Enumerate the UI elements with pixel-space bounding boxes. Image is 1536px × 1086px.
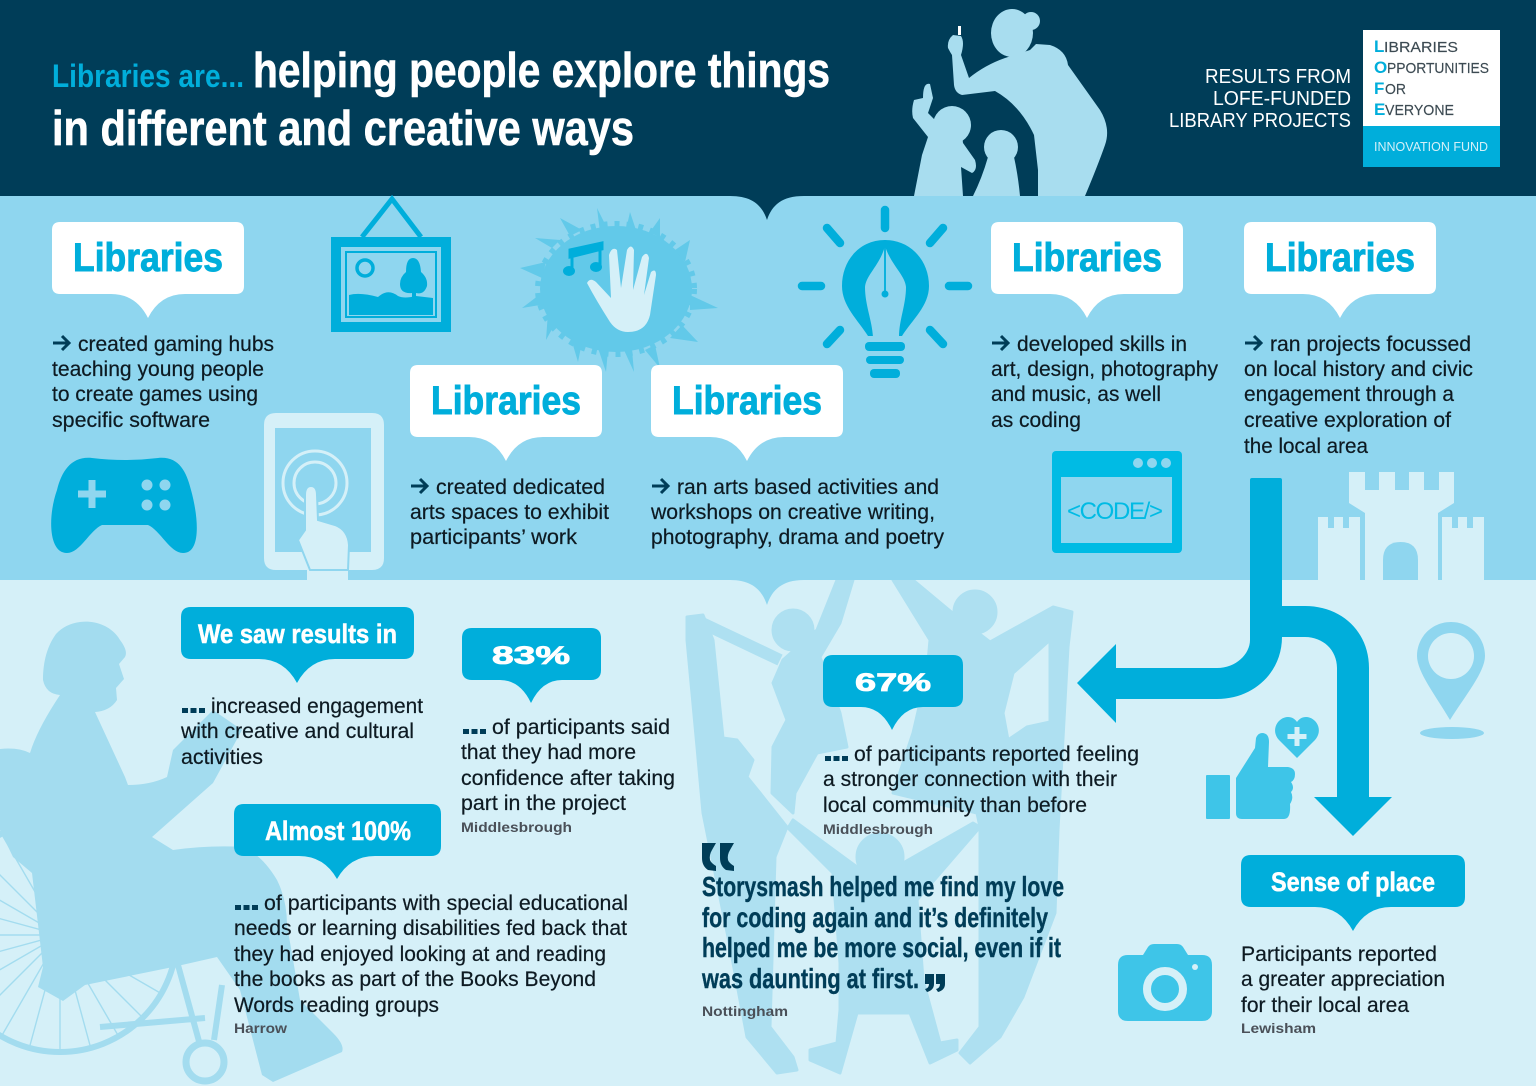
text: local area bbox=[1241, 943, 1445, 1036]
callout: we saw results in: We saw results in bbox=[198, 619, 397, 649]
icon: tablet with touch bbox=[264, 413, 384, 580]
text: community bbox=[823, 743, 1139, 837]
text: arts spaces: arts spaces to exhibit bbox=[410, 501, 609, 524]
text: special educational needs bbox=[234, 892, 628, 1036]
callout: libraries 4: Libraries bbox=[1012, 236, 1162, 280]
text: engagement: activities bbox=[181, 746, 263, 769]
text: community: Middlesbrough bbox=[823, 821, 933, 837]
arrow: split direction arrow bbox=[1077, 478, 1392, 836]
text: arts activities: workshops on creative writing, bbox=[650, 501, 935, 524]
text: community: local community than before bbox=[823, 794, 1087, 817]
text: skills bbox=[991, 333, 1218, 432]
text: local history: the local area bbox=[1244, 435, 1368, 458]
text: gaming hubs bbox=[52, 333, 274, 432]
text: engagement: increased engagement bbox=[211, 695, 423, 718]
text: skills: as coding bbox=[991, 409, 1081, 432]
header background bbox=[0, 0, 1536, 196]
text: arts spaces: participants’ work bbox=[410, 526, 578, 549]
text: local history bbox=[1244, 333, 1473, 458]
text: community: of participants reported feeling bbox=[854, 743, 1139, 766]
silhouette: adult and children drawing bbox=[912, 9, 1107, 196]
logo: F bbox=[1374, 79, 1384, 98]
text: gaming hubs: created gaming hubs bbox=[78, 333, 274, 356]
logo: OR bbox=[1385, 81, 1406, 98]
icon: thumbs up with heart bbox=[1206, 717, 1319, 819]
logo: PPORTUNITIES bbox=[1387, 60, 1489, 77]
header notch bbox=[730, 196, 804, 220]
icon: castle bbox=[1318, 472, 1484, 580]
silhouette: children playing bbox=[687, 580, 1072, 1073]
text: special educational needs: of participants with special educational bbox=[264, 892, 628, 915]
text: confidence: part in the project bbox=[461, 792, 626, 815]
text: special educational needs: Words reading groups bbox=[234, 994, 439, 1017]
icon: camera bbox=[1118, 944, 1212, 1021]
title: in different and creative ways bbox=[52, 102, 634, 156]
callout: almost 100%: Almost 100% bbox=[265, 816, 411, 846]
text: local area: for their local area bbox=[1241, 994, 1409, 1017]
icon: code window: <CODE/> bbox=[1067, 498, 1163, 525]
callout: libraries 2 bbox=[410, 365, 602, 461]
icon: paint splat with hand and music note bbox=[520, 208, 718, 372]
callout: libraries 2: Libraries bbox=[431, 379, 581, 423]
icon: location pin bbox=[1417, 622, 1485, 739]
quote: Storysmash: Nottingham bbox=[702, 1003, 788, 1019]
header caption: LOFE-FUNDED bbox=[1213, 88, 1351, 110]
text: special educational needs: they had enjoyed looking at and reading bbox=[234, 943, 606, 966]
quote: Storysmash: for coding again and it’s definitely bbox=[702, 902, 1048, 933]
callout: we saw results in bbox=[181, 607, 414, 683]
logo: IBRARIES bbox=[1384, 39, 1458, 56]
logo: INNOVATION FUND bbox=[1374, 140, 1488, 154]
callout: libraries 3: Libraries bbox=[672, 379, 822, 423]
text: arts activities bbox=[650, 476, 945, 549]
text: confidence: of participants said bbox=[492, 716, 670, 739]
callout: sense of place: Sense of place bbox=[1271, 867, 1435, 897]
callout: libraries 5 bbox=[1244, 222, 1436, 318]
text: skills: and music, as well bbox=[991, 383, 1161, 406]
quote: Storysmash: helped me be more social, even if it bbox=[702, 932, 1061, 963]
text: community: a stronger connection with their bbox=[823, 768, 1117, 791]
text: local area: a greater appreciation bbox=[1241, 968, 1445, 991]
icon: light bulb with pen nib bbox=[802, 210, 968, 378]
text: local history: on local history and civic bbox=[1244, 358, 1473, 381]
callout: sense of place bbox=[1241, 855, 1465, 931]
quote: Storysmash bbox=[701, 843, 1064, 1019]
silhouette: reader in wheelchair bbox=[0, 622, 343, 1082]
text: skills: art, design, photography bbox=[991, 358, 1218, 381]
text: special educational needs: Harrow bbox=[234, 1020, 287, 1036]
text: local history: ran projects focussed bbox=[1270, 333, 1471, 356]
header caption: RESULTS FROM bbox=[1205, 66, 1351, 88]
title: helping people explore things bbox=[253, 44, 830, 98]
header caption bbox=[1169, 66, 1351, 132]
callout: libraries 1 bbox=[52, 222, 244, 318]
callout: libraries 3 bbox=[651, 365, 843, 461]
callout: libraries 5: Libraries bbox=[1265, 236, 1415, 280]
logo: L bbox=[1374, 37, 1384, 56]
text: skills: developed skills in bbox=[1017, 333, 1187, 356]
text: local area: Participants reported bbox=[1241, 943, 1437, 966]
title bbox=[52, 44, 830, 156]
background: middle panel bbox=[0, 196, 1536, 580]
text: confidence bbox=[461, 716, 675, 835]
text: arts activities: ran arts based activities and bbox=[677, 476, 939, 499]
icon: code window bbox=[1052, 451, 1182, 553]
logo: VERYONE bbox=[1385, 102, 1454, 119]
callout: 67%: 67% bbox=[855, 669, 931, 697]
lower panel notch bbox=[730, 580, 804, 605]
text: confidence: that they had more bbox=[461, 741, 636, 764]
text: special educational needs: the books as part of the Books Beyond bbox=[234, 968, 596, 991]
text: arts activities: photography, drama and poetry bbox=[651, 526, 945, 549]
text: arts spaces: created dedicated bbox=[436, 476, 605, 499]
text: arts spaces bbox=[410, 476, 609, 549]
callout: libraries 4 bbox=[991, 222, 1183, 318]
callout: libraries 1: Libraries bbox=[73, 236, 223, 280]
callout: 67% bbox=[823, 655, 963, 730]
text: engagement: with creative and cultural bbox=[180, 720, 414, 743]
text: confidence: Middlesbrough bbox=[461, 819, 572, 835]
icon: game controller bbox=[51, 458, 197, 553]
callout: 83% bbox=[462, 628, 601, 703]
text: special educational needs: needs or learning disabilities fed back that bbox=[234, 917, 627, 940]
logo bbox=[1363, 30, 1500, 167]
callout: 83%: 83% bbox=[492, 642, 570, 670]
text: gaming hubs: teaching young people bbox=[52, 358, 264, 381]
background: lower panel bbox=[0, 580, 1536, 1086]
text: engagement bbox=[180, 695, 423, 769]
header caption: LIBRARY PROJECTS bbox=[1169, 110, 1351, 132]
text: confidence: confidence after taking bbox=[461, 767, 675, 790]
title: Libraries are... bbox=[52, 58, 244, 94]
text: gaming hubs: to create games using bbox=[52, 383, 258, 406]
logo: O bbox=[1374, 58, 1387, 77]
icon: picture frame bbox=[336, 199, 446, 327]
text: gaming hubs: specific software bbox=[52, 409, 210, 432]
text: local history: engagement through a bbox=[1244, 383, 1454, 406]
text: local area: Lewisham bbox=[1241, 1020, 1316, 1036]
text: local history: creative exploration of bbox=[1244, 409, 1451, 432]
quote: Storysmash: Storysmash helped me find my love bbox=[702, 871, 1064, 902]
callout: almost 100% bbox=[234, 804, 441, 879]
logo: E bbox=[1374, 100, 1385, 119]
quote: Storysmash: was daunting at first. bbox=[701, 963, 919, 994]
